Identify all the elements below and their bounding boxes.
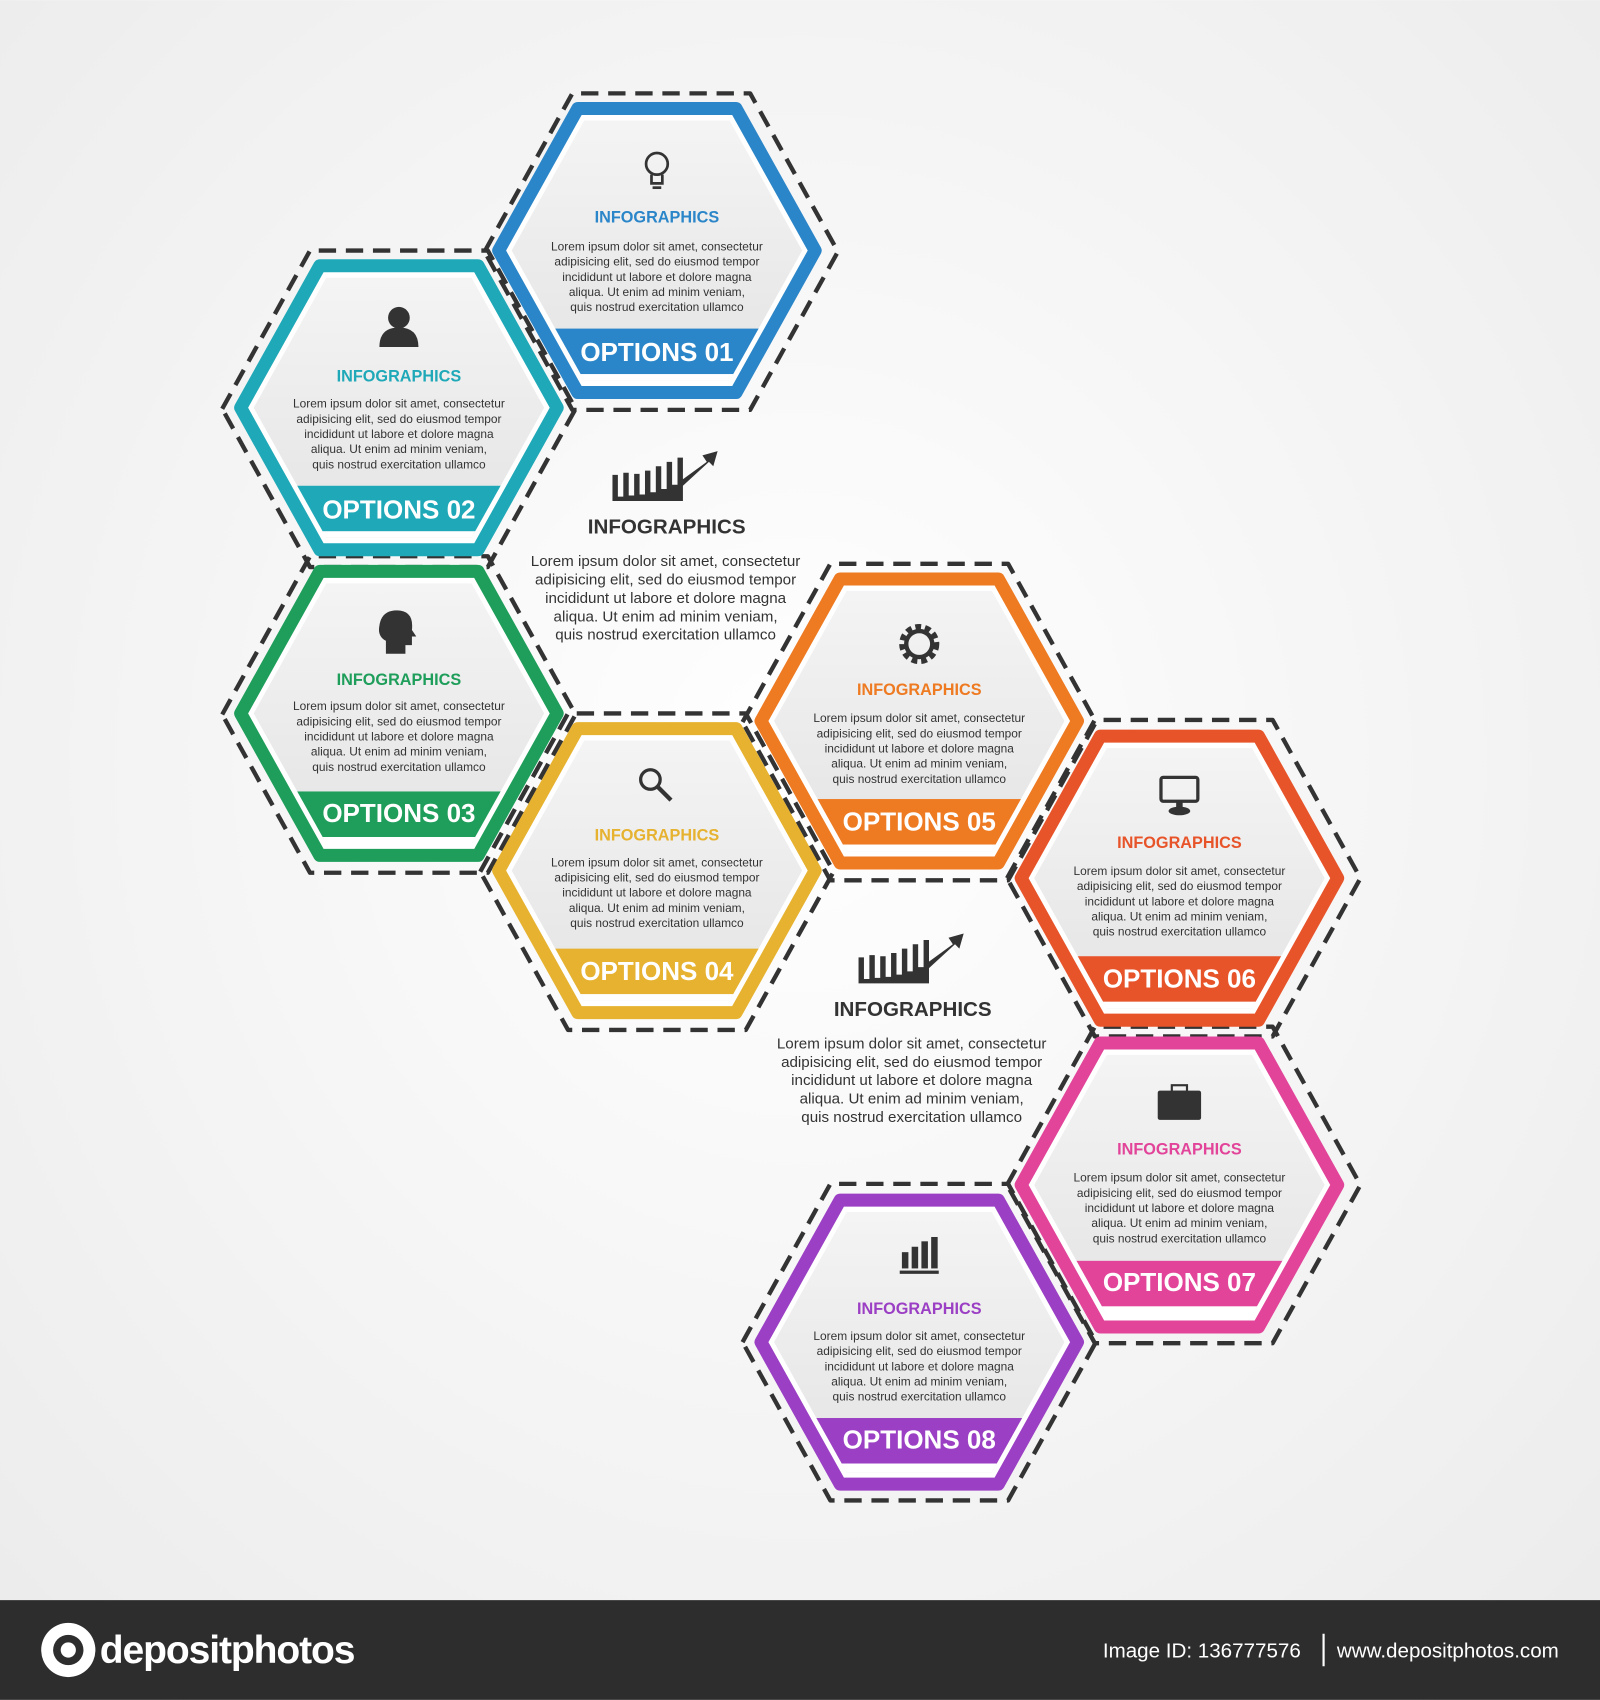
hexagon 02: quis nostrud exercitation ullamco bbox=[312, 457, 486, 471]
center text block 2: incididunt ut labore et dolore magna bbox=[791, 1072, 1033, 1089]
icon: monitor bbox=[1161, 777, 1198, 815]
hexagon 03: adipisicing elit, sed do eiusmod tempor bbox=[296, 714, 502, 728]
hexagon 06: adipisicing elit, sed do eiusmod tempor bbox=[1077, 879, 1282, 893]
footer bar: www.depositphotos.com bbox=[1336, 1640, 1559, 1663]
center text block 1: quis nostrud exercitation ullamco bbox=[555, 627, 776, 644]
center text block 2: INFOGRAPHICS bbox=[834, 998, 992, 1021]
hexagon 06: OPTIONS 06 bbox=[1103, 964, 1256, 994]
icon: briefcase bbox=[1158, 1085, 1201, 1120]
hexagon 05 bbox=[757, 579, 1082, 863]
center text block 1: adipisicing elit, sed do eiusmod tempor bbox=[535, 571, 796, 588]
hexagon 03: INFOGRAPHICS bbox=[337, 671, 461, 689]
hexagon 08: aliqua. Ut enim ad minim veniam, bbox=[831, 1375, 1007, 1389]
hexagon 03: aliqua. Ut enim ad minim veniam, bbox=[311, 745, 487, 759]
hexagon 04: INFOGRAPHICS bbox=[595, 826, 719, 844]
hexagon 04: adipisicing elit, sed do eiusmod tempor bbox=[554, 870, 760, 884]
hexagon 08 bbox=[757, 1200, 1082, 1484]
icon: head bbox=[379, 610, 416, 654]
hexagon 02 bbox=[236, 266, 562, 550]
hexagon 08: quis nostrud exercitation ullamco bbox=[833, 1390, 1006, 1404]
center text block 2 bbox=[777, 933, 1046, 1126]
hexagon 02: incididunt ut labore et dolore magna bbox=[304, 427, 494, 441]
hexagon 02: Lorem ipsum dolor sit amet, consectetur bbox=[293, 397, 505, 411]
hexagon 04 bbox=[494, 729, 820, 1013]
hexagon 05: INFOGRAPHICS bbox=[857, 681, 982, 699]
hexagon 04: aliqua. Ut enim ad minim veniam, bbox=[569, 901, 745, 915]
icon: bulb bbox=[646, 153, 668, 188]
hexagon 01 bbox=[494, 109, 820, 393]
hexagon 07: adipisicing elit, sed do eiusmod tempor bbox=[1077, 1186, 1282, 1200]
center text block 1: Lorem ipsum dolor sit amet, consectetur bbox=[531, 553, 800, 570]
hexagon 06: aliqua. Ut enim ad minim veniam, bbox=[1091, 909, 1267, 923]
hexagon 06: quis nostrud exercitation ullamco bbox=[1093, 925, 1266, 939]
hexagon 01: incididunt ut labore et dolore magna bbox=[562, 270, 752, 284]
hexagon 07: OPTIONS 07 bbox=[1103, 1267, 1256, 1297]
hexagon 01: Lorem ipsum dolor sit amet, consectetur bbox=[551, 240, 763, 254]
hexagon 04: Lorem ipsum dolor sit amet, consectetur bbox=[551, 855, 763, 869]
hexagon 06 bbox=[1017, 736, 1342, 1020]
hexagon 08: INFOGRAPHICS bbox=[857, 1300, 982, 1318]
hexagon 06: incididunt ut labore et dolore magna bbox=[1085, 894, 1274, 908]
hexagon 02: OPTIONS 02 bbox=[322, 494, 475, 524]
hexagon 05: incididunt ut labore et dolore magna bbox=[825, 741, 1014, 755]
hexagon 03: incididunt ut labore et dolore magna bbox=[304, 730, 494, 744]
hexagon 08: Lorem ipsum dolor sit amet, consectetur bbox=[813, 1329, 1025, 1343]
hexagon 02: aliqua. Ut enim ad minim veniam, bbox=[311, 442, 487, 456]
hexagon 03: quis nostrud exercitation ullamco bbox=[312, 760, 486, 774]
center text block 1: incididunt ut labore et dolore magna bbox=[545, 590, 787, 607]
hexagon 05: OPTIONS 05 bbox=[843, 806, 996, 836]
hexagon 05: Lorem ipsum dolor sit amet, consectetur bbox=[813, 711, 1025, 725]
footer bar: Image ID: 136777576 bbox=[1103, 1640, 1301, 1663]
hexagon 06: INFOGRAPHICS bbox=[1117, 834, 1242, 852]
hexagon 07 bbox=[1017, 1043, 1342, 1327]
footer bar bbox=[0, 1600, 1600, 1700]
center text block 2: aliqua. Ut enim ad minim veniam, bbox=[800, 1091, 1024, 1108]
hexagon 01: OPTIONS 01 bbox=[580, 337, 733, 367]
center text block 1 bbox=[531, 451, 800, 644]
hexagon 04: OPTIONS 04 bbox=[580, 956, 734, 986]
hexagon 01: quis nostrud exercitation ullamco bbox=[570, 300, 744, 314]
hexagon 03 bbox=[236, 571, 562, 855]
hexagon 02: INFOGRAPHICS bbox=[337, 368, 461, 386]
center text block 2: Lorem ipsum dolor sit amet, consectetur bbox=[777, 1035, 1046, 1052]
icon: user bbox=[379, 307, 418, 347]
hexagon 04: quis nostrud exercitation ullamco bbox=[570, 916, 744, 930]
hexagon 07: quis nostrud exercitation ullamco bbox=[1093, 1231, 1266, 1245]
logo: depositphotos bbox=[100, 1629, 355, 1672]
hexagon 01: aliqua. Ut enim ad minim veniam, bbox=[569, 285, 745, 299]
hexagon 08: adipisicing elit, sed do eiusmod tempor bbox=[817, 1344, 1022, 1358]
center text block 1: aliqua. Ut enim ad minim veniam, bbox=[554, 608, 778, 625]
hexagon 03: Lorem ipsum dolor sit amet, consectetur bbox=[293, 699, 505, 713]
hexagon 03: OPTIONS 03 bbox=[322, 798, 475, 828]
icon: rising chart arrow bbox=[859, 933, 964, 983]
hexagon 05: quis nostrud exercitation ullamco bbox=[833, 772, 1006, 786]
hexagon 06: Lorem ipsum dolor sit amet, consectetur bbox=[1074, 864, 1285, 878]
center text block 2: adipisicing elit, sed do eiusmod tempor bbox=[781, 1054, 1042, 1071]
icon: magnifier bbox=[641, 770, 671, 800]
hexagon 01: INFOGRAPHICS bbox=[595, 208, 719, 226]
hexagon 05: aliqua. Ut enim ad minim veniam, bbox=[831, 757, 1007, 771]
hexagon 02: adipisicing elit, sed do eiusmod tempor bbox=[296, 412, 502, 426]
hexagon 07: INFOGRAPHICS bbox=[1117, 1141, 1242, 1159]
hexagon 07: Lorem ipsum dolor sit amet, consectetur bbox=[1074, 1171, 1285, 1185]
hexagon 01: adipisicing elit, sed do eiusmod tempor bbox=[554, 255, 760, 269]
logo bbox=[41, 1623, 355, 1677]
center text block 2: quis nostrud exercitation ullamco bbox=[801, 1109, 1022, 1126]
hexagon 08: OPTIONS 08 bbox=[843, 1424, 996, 1454]
hexagon 07: aliqua. Ut enim ad minim veniam, bbox=[1091, 1216, 1267, 1230]
hexagon 04: incididunt ut labore et dolore magna bbox=[562, 886, 752, 900]
hexagon 05: adipisicing elit, sed do eiusmod tempor bbox=[817, 726, 1022, 740]
hexagon 08: incididunt ut labore et dolore magna bbox=[825, 1359, 1014, 1373]
icon: rising chart arrow bbox=[612, 451, 718, 501]
dashed outlines bbox=[222, 93, 1360, 1500]
center text block 1: INFOGRAPHICS bbox=[588, 515, 746, 538]
icon: bar chart bbox=[900, 1237, 939, 1274]
icon: gear bbox=[903, 628, 936, 660]
hexagon 07: incididunt ut labore et dolore magna bbox=[1085, 1201, 1274, 1215]
